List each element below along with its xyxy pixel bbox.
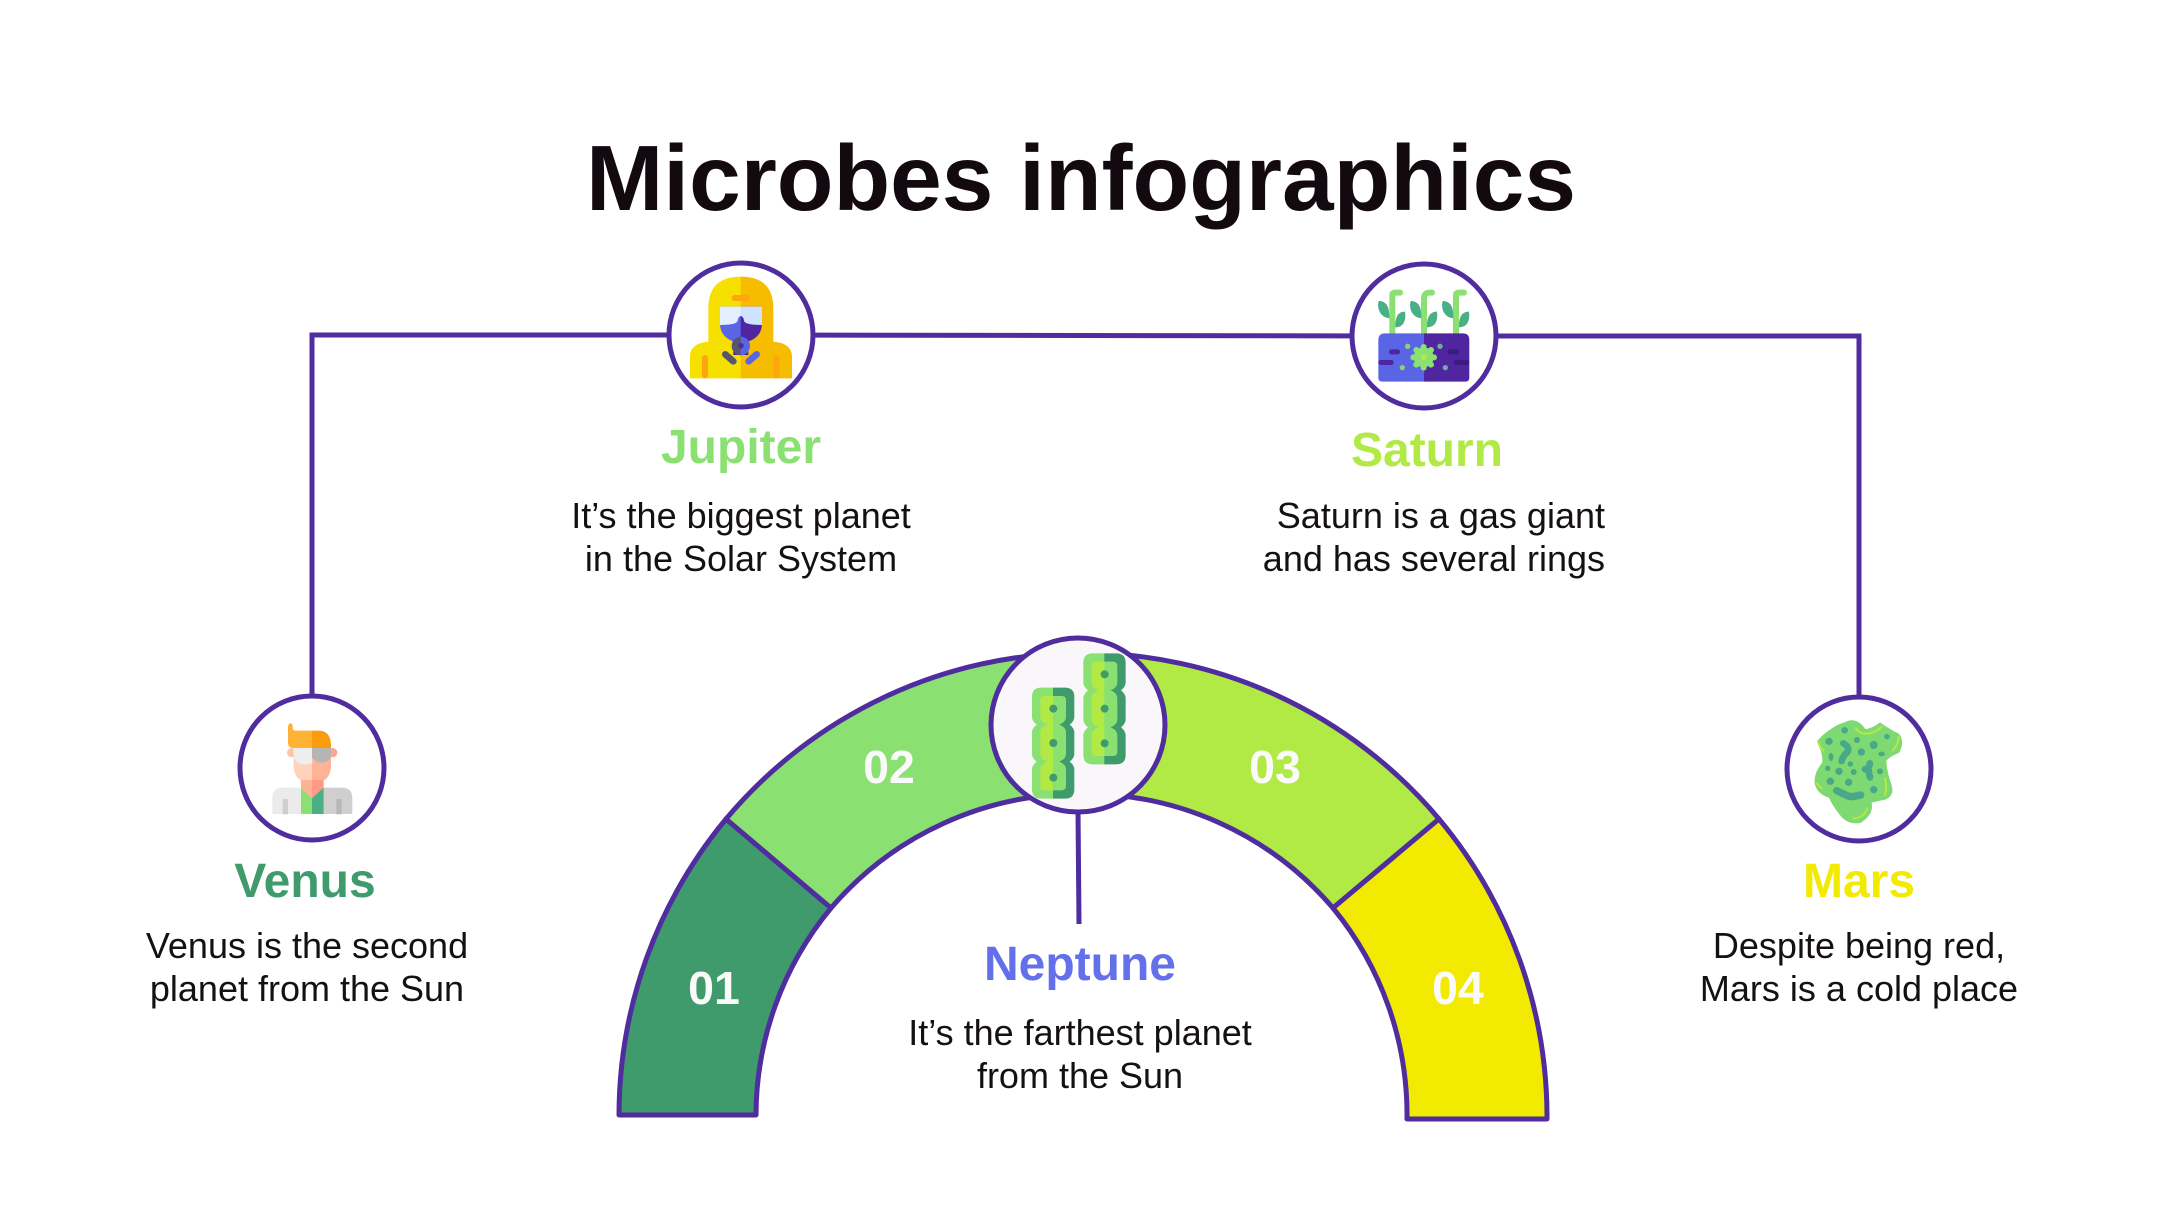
- text: Venus description: Venus is the second: [146, 925, 468, 966]
- icon: scientist: [240, 696, 384, 840]
- connector line: Venus to Saturn to Mars: [312, 335, 1859, 700]
- number 01: 01: [688, 962, 740, 1014]
- heading: Mars: Mars: [1803, 855, 1915, 908]
- icon: bacilli chains: [1032, 653, 1126, 799]
- icon: soil with sprouts: [1352, 264, 1496, 408]
- gauge segment 01: [619, 819, 831, 1115]
- gauge segment 03: [1080, 653, 1439, 908]
- text: Saturn description: Saturn is a gas giant: [1277, 495, 1605, 536]
- panel: Venus: [146, 696, 468, 1009]
- panel: Neptune text: [908, 938, 1252, 1096]
- text: Neptune description: It’s the farthest planet: [908, 1012, 1252, 1053]
- semicircular gauge: [619, 653, 1547, 1119]
- heading: Venus: Venus: [234, 855, 376, 908]
- number 03: 03: [1249, 741, 1301, 793]
- text: Neptune description: from the Sun: [977, 1055, 1183, 1096]
- icon: microbe blob: [1787, 697, 1931, 841]
- gauge segment 02: [726, 653, 1080, 908]
- text: Jupiter description: It’s the biggest planet: [571, 495, 911, 536]
- connector stem: center circle to Neptune: [1078, 810, 1079, 924]
- panel: Mars: [1700, 697, 2018, 1009]
- heading: Jupiter: Jupiter: [661, 421, 821, 474]
- number 02: 02: [863, 741, 915, 793]
- panel: Neptune circle with bacteria icon: [991, 638, 1165, 812]
- icon: hazmat suit: [669, 263, 813, 407]
- text: Saturn description: and has several rings: [1263, 538, 1605, 579]
- heading: Saturn: Saturn: [1351, 424, 1503, 477]
- number 04: 04: [1432, 962, 1484, 1014]
- text: Jupiter description: in the Solar System: [585, 538, 897, 579]
- gauge segment 04: [1333, 819, 1547, 1119]
- heading: Neptune: Neptune: [984, 938, 1176, 991]
- text: Mars description: Despite being red,: [1713, 925, 2005, 966]
- panel: Saturn: [1263, 264, 1605, 579]
- title: Microbes infographics: [586, 126, 1576, 230]
- panel: Jupiter: [571, 263, 911, 579]
- text: Venus description: planet from the Sun: [150, 968, 464, 1009]
- text: Mars description: Mars is a cold place: [1700, 968, 2018, 1009]
